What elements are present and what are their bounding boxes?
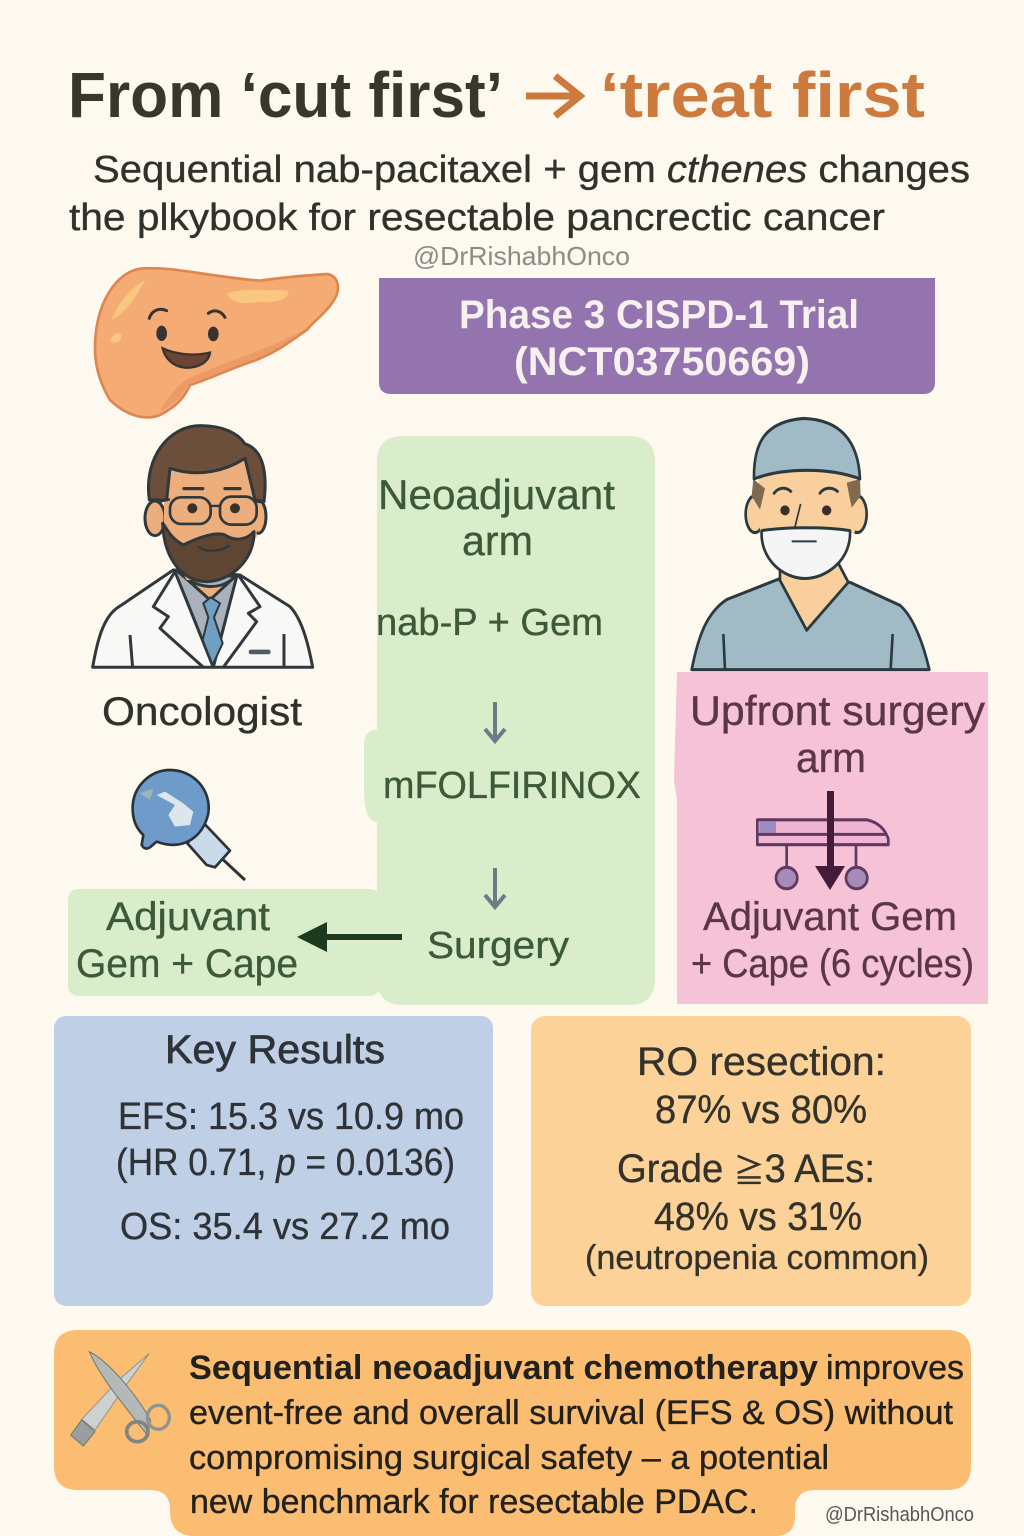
subtitle: Sequential nab-pacitaxel + gem cthenes changes bbox=[93, 149, 970, 191]
panel: upfront surgery arm: Adjuvant Gem bbox=[703, 895, 957, 939]
panel: conclusion bbox=[54, 1330, 971, 1536]
panel: resection and adverse events: 48% vs 31% bbox=[654, 1195, 862, 1239]
icon: oncologist portrait bbox=[93, 426, 313, 668]
panel: key results bbox=[54, 1016, 493, 1306]
panel: neoadjuvant arm: nab-P + Gem bbox=[376, 602, 603, 644]
handle: top watermark: @DrRishabhOnco bbox=[413, 241, 630, 271]
panel: resection and adverse events: (neutropenia common) bbox=[585, 1239, 929, 1277]
icon: scissors and syringe bbox=[71, 1352, 169, 1446]
title: From ‘cut first’ bbox=[68, 59, 503, 131]
icon: stretcher bbox=[757, 820, 888, 889]
panel: resection and adverse events bbox=[531, 1016, 971, 1306]
panel: trial banner bbox=[379, 278, 935, 394]
panel: neoadjuvant arm: Neoadjuvant bbox=[378, 471, 615, 518]
panel: adjuvant box bbox=[68, 889, 380, 996]
panel: key results: Key Results bbox=[165, 1028, 385, 1072]
panel: resection and adverse events: Grade ≧3 AEs: bbox=[617, 1147, 875, 1191]
panel: neoadjuvant arm bbox=[364, 436, 655, 1005]
panel: upfront surgery arm: Upfront surgery bbox=[690, 687, 985, 734]
title: ‘treat first bbox=[600, 59, 925, 131]
panel: conclusion: compromising surgical safety – a potential bbox=[189, 1439, 829, 1477]
panel: upfront surgery arm bbox=[674, 672, 988, 1004]
panel: neoadjuvant arm: Surgery bbox=[427, 925, 569, 967]
panel: neoadjuvant arm: mFOLFIRINOX bbox=[383, 765, 641, 807]
panel: resection and adverse events: 87% vs 80% bbox=[655, 1088, 867, 1132]
panel: key results: (HR 0.71, p = 0.0136) bbox=[116, 1142, 455, 1184]
panel: adjuvant box: Gem + Cape bbox=[76, 942, 298, 986]
icon: syringe magnifier bbox=[133, 770, 245, 880]
title bbox=[68, 59, 925, 131]
arrow: surgery to adjuvant bbox=[297, 922, 402, 952]
subtitle: the plkybook for resectable pancrectic cancer bbox=[69, 197, 885, 239]
panel: resection and adverse events: RO resection: bbox=[637, 1040, 886, 1084]
panel: upfront surgery arm: + Cape (6 cycles) bbox=[691, 942, 974, 986]
panel: key results: EFS: 15.3 vs 10.9 mo bbox=[118, 1096, 464, 1138]
subtitle bbox=[69, 149, 970, 239]
panel: conclusion: Sequential neoadjuvant chemotherapy bbox=[189, 1349, 818, 1387]
icon: surgeon portrait bbox=[692, 418, 929, 670]
panel: conclusion: event-free and overall survival (EFS & OS) without bbox=[189, 1394, 954, 1432]
panel: conclusion: new benchmark for resectable PDAC. bbox=[190, 1483, 758, 1521]
panel: key results: OS: 35.4 vs 27.2 mo bbox=[120, 1206, 450, 1248]
panel: trial banner: Phase 3 CISPD-1 Trial bbox=[459, 293, 859, 337]
panel: trial banner: (NCT03750669) bbox=[514, 340, 810, 384]
panel: upfront surgery arm: arm bbox=[796, 734, 866, 781]
panel: neoadjuvant arm: arm bbox=[462, 517, 533, 564]
arrow: surgery to adjuvant gem bbox=[815, 791, 845, 890]
icon: smiling liver bbox=[95, 268, 338, 417]
label: oncologist: Oncologist bbox=[102, 690, 302, 734]
panel: conclusion: improves bbox=[826, 1349, 964, 1387]
handle: bottom watermark: @DrRishabhOnco bbox=[825, 1504, 974, 1526]
panel: adjuvant box: Adjuvant bbox=[106, 895, 270, 939]
